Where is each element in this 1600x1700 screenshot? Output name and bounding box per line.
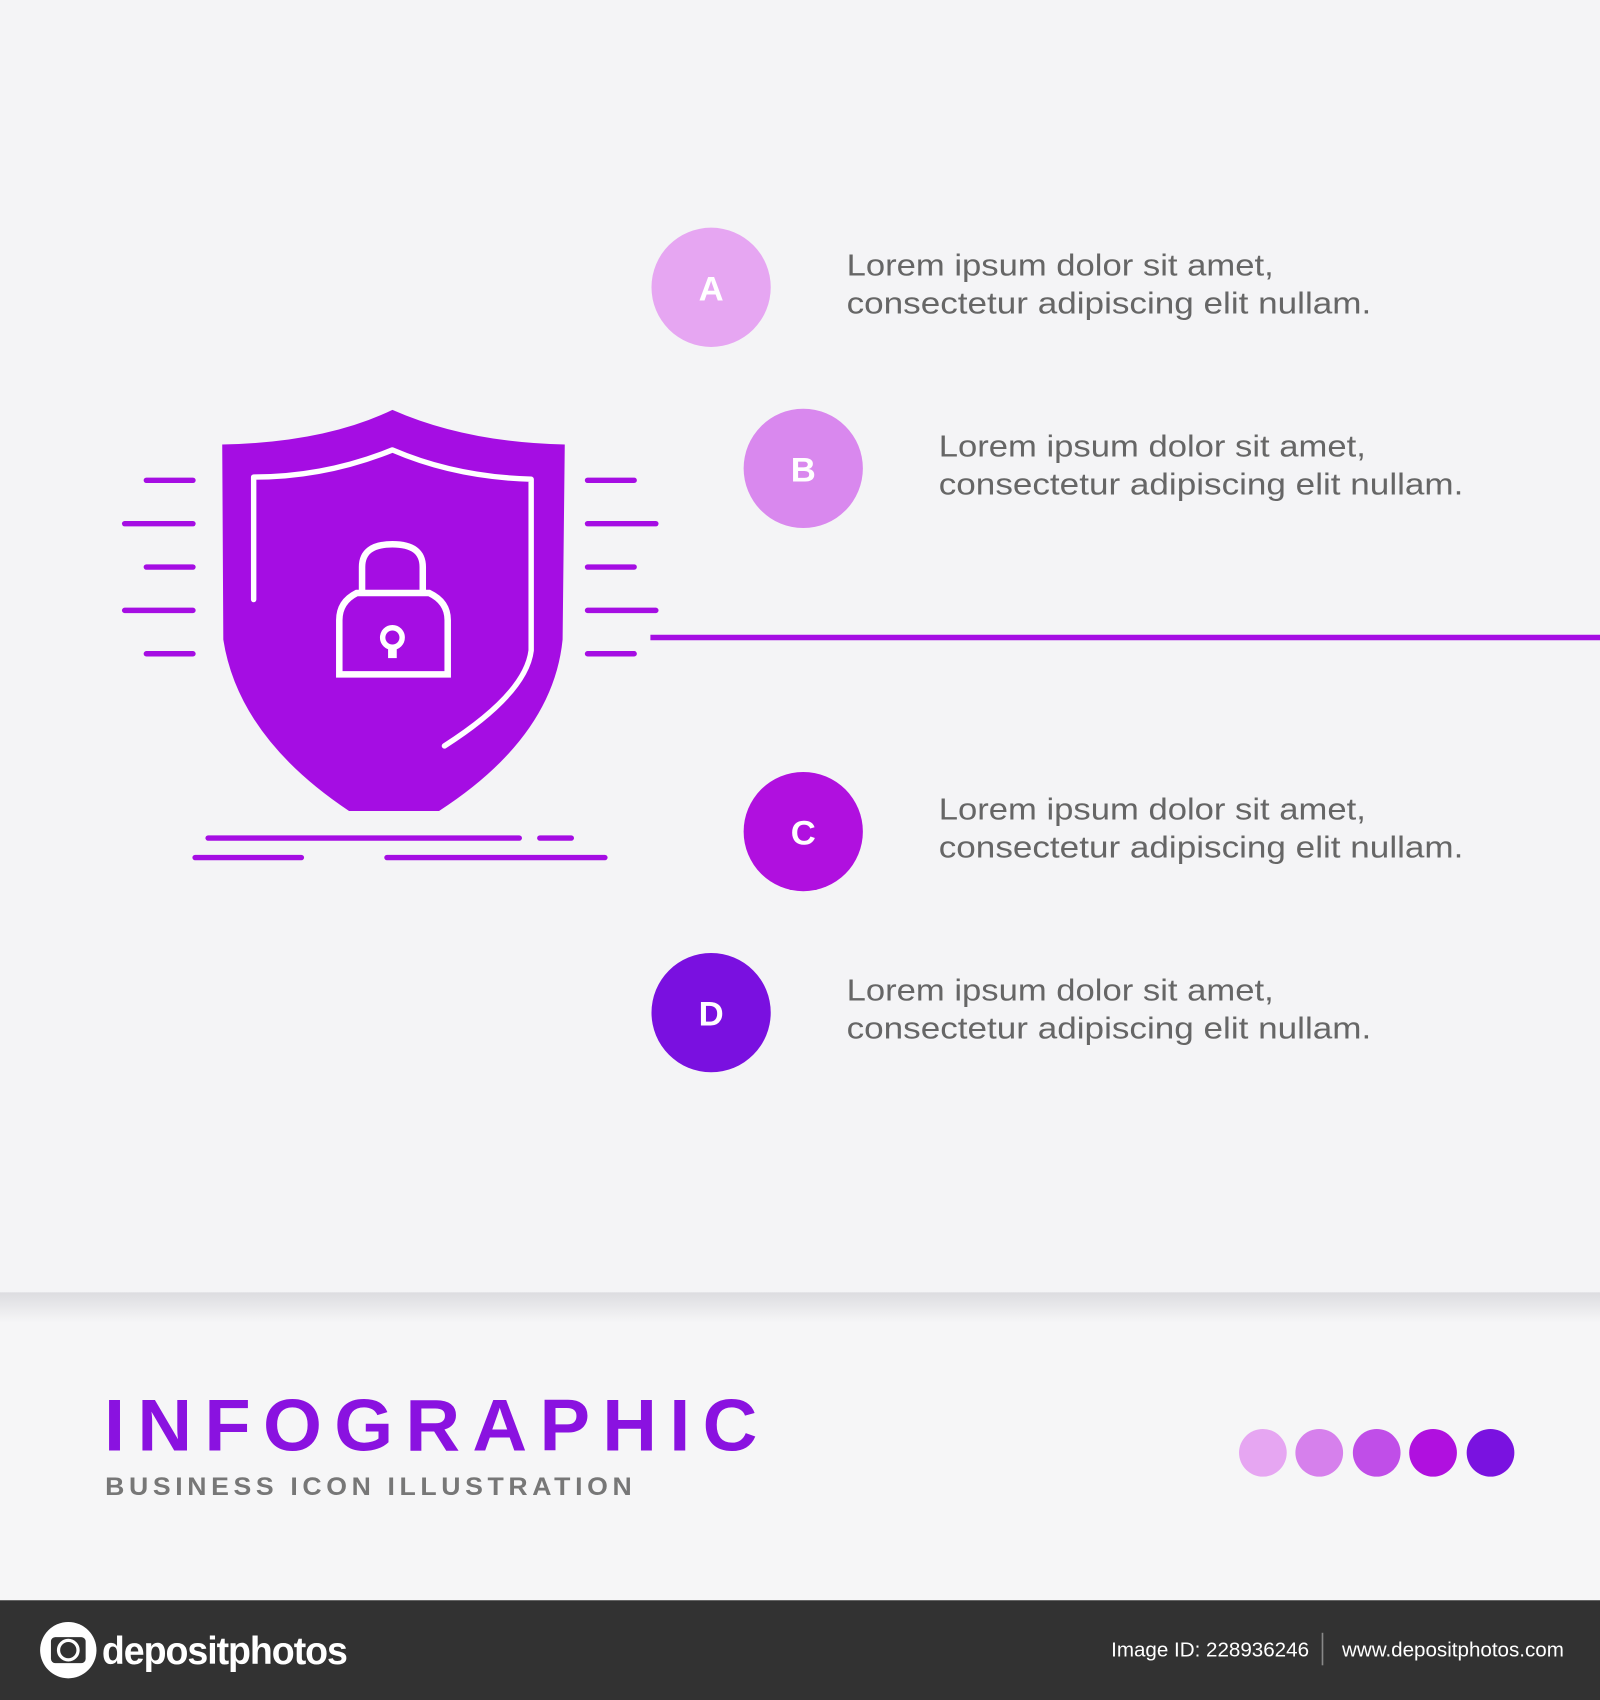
step D: consectetur adipiscing elit nullam. — [847, 1013, 1371, 1046]
step D: Lorem ipsum dolor sit amet, — [847, 975, 1274, 1008]
dots — [1239, 1429, 1514, 1477]
step A: A — [699, 270, 724, 308]
step C: consectetur adipiscing elit nullam. — [939, 832, 1463, 865]
footer — [0, 1600, 1600, 1700]
step D — [651, 953, 1371, 1072]
footer: Image ID: 228936246 — [1111, 1639, 1309, 1662]
footer: depositphotos — [102, 1630, 347, 1673]
step B — [744, 409, 1463, 528]
title: INFOGRAPHIC — [104, 1384, 770, 1467]
step A — [651, 228, 1371, 347]
icon: camera logo — [40, 1622, 96, 1678]
timeline line — [650, 635, 1600, 640]
speed lines left — [125, 480, 656, 858]
subtitle: BUSINESS ICON ILLUSTRATION — [105, 1473, 636, 1501]
icon: shield with lock — [125, 410, 656, 858]
step A: consectetur adipiscing elit nullam. — [847, 287, 1371, 320]
step B: B — [791, 451, 816, 489]
step C: Lorem ipsum dolor sit amet, — [939, 794, 1366, 827]
step D: D — [699, 996, 724, 1034]
step A: Lorem ipsum dolor sit amet, — [847, 249, 1274, 282]
step B: Lorem ipsum dolor sit amet, — [939, 430, 1366, 463]
step C: C — [791, 815, 816, 853]
footer: www.depositphotos.com — [1341, 1639, 1564, 1662]
step B: consectetur adipiscing elit nullam. — [939, 468, 1463, 501]
step C — [744, 772, 1463, 891]
